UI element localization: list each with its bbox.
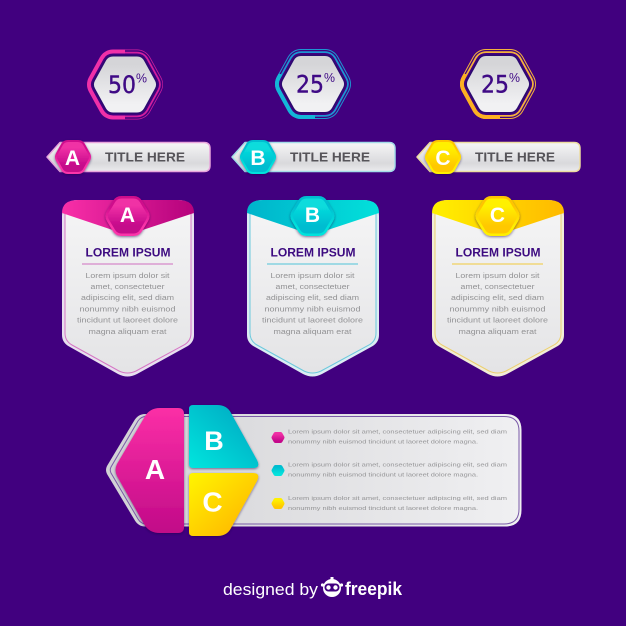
card A: adipiscing elit, sed diam [81, 293, 174, 302]
bullet: blue [274, 467, 282, 474]
segment A: A [145, 454, 165, 485]
footer credit [223, 577, 403, 599]
list text: Lorem ipsum dolor sit amet, consectetuer adipiscing elit, sed diam [288, 496, 507, 502]
title bar A: A [65, 147, 80, 170]
percentage hexagon: 25% yellow: % [509, 70, 520, 85]
percentage hexagon: 50% [102, 64, 148, 104]
card C [432, 200, 564, 376]
badge A [116, 206, 140, 226]
bottom panel [106, 405, 522, 536]
card B: amet, consectetuer [276, 282, 350, 291]
percentage hexagon: 25% yellow [475, 64, 521, 104]
card C: Lorem ipsum dolor sit [456, 271, 541, 280]
card A: magna aliquam erat [88, 327, 168, 336]
percentage hexagon: 25% yellow: 25 [481, 70, 509, 98]
card B: LOREM IPSUM [270, 246, 356, 260]
title bar B [232, 142, 395, 172]
badge C [433, 148, 453, 166]
list text: Lorem ipsum dolor sit amet, consectetuer adipiscing elit, sed diam [288, 462, 507, 468]
title bar C: TITLE HERE [475, 150, 555, 164]
card B [247, 200, 379, 376]
card A: LOREM IPSUM [86, 246, 170, 260]
card C: magna aliquam erat [458, 327, 538, 336]
card B: Lorem ipsum dolor sit [270, 271, 356, 280]
footer credit: designed by [223, 580, 319, 599]
bullet: pink [274, 434, 282, 441]
card A: Lorem ipsum dolor sit [86, 271, 171, 280]
badge B [300, 206, 324, 226]
title bar C [417, 142, 580, 172]
percentage hexagon: 25% blue [290, 64, 336, 104]
percentage hexagon: 50%: % [136, 70, 147, 86]
title bar A [47, 142, 210, 172]
list text: nonummy nibh euismod tincidunt ut laoreet dolore magna. [288, 472, 478, 478]
card B: nonummy nibh euismod [264, 304, 360, 314]
card B: B [305, 204, 320, 227]
card A: tincidunt ut laoreet dolore [77, 316, 178, 324]
segment C [189, 473, 258, 536]
card C: nonummy nibh euismod [450, 304, 546, 314]
card C: C [490, 204, 505, 227]
segment C: C [202, 486, 223, 518]
card B: magna aliquam erat [274, 327, 353, 336]
segment B [189, 405, 258, 468]
card C: LOREM IPSUM [456, 246, 540, 260]
list text: nonummy nibh euismod tincidunt ut laoreet dolore magna. [288, 440, 478, 446]
badge C [486, 206, 510, 226]
bullet: yellow [274, 500, 282, 507]
title bar B: B [250, 147, 266, 170]
panel inner outline [110, 416, 519, 524]
percentage hexagon: 25% blue: 25 [296, 70, 324, 98]
card A: A [120, 204, 135, 227]
panel body [106, 414, 522, 526]
title bar C: C [435, 147, 451, 170]
list text: nonummy nibh euismod tincidunt ut laoreet dolore magna. [288, 506, 478, 512]
segment B: B [204, 426, 224, 456]
footer credit: freepik [345, 579, 403, 599]
title bar A: TITLE HERE [105, 150, 185, 164]
card A [62, 200, 194, 376]
percentage hexagon: 25% blue: % [324, 70, 335, 85]
card A: amet, consectetuer [90, 282, 165, 291]
list text: Lorem ipsum dolor sit amet, consectetuer adipiscing elit, sed diam [288, 430, 507, 436]
card C: amet, consectetuer [460, 282, 535, 291]
card A: nonummy nibh euismod [80, 304, 176, 314]
percentage hexagon: 50%: 50 [108, 71, 136, 99]
icon: freepik mascot [321, 577, 343, 597]
card C: tincidunt ut laoreet dolore [447, 316, 548, 324]
card B: tincidunt ut laoreet dolore [262, 316, 363, 324]
title bar B: TITLE HERE [290, 150, 370, 164]
card C: adipiscing elit, sed diam [451, 293, 544, 302]
badge B [248, 148, 268, 166]
badge A [63, 148, 83, 166]
segment A [116, 408, 184, 533]
card B: adipiscing elit, sed diam [266, 293, 359, 302]
list text [288, 430, 507, 512]
